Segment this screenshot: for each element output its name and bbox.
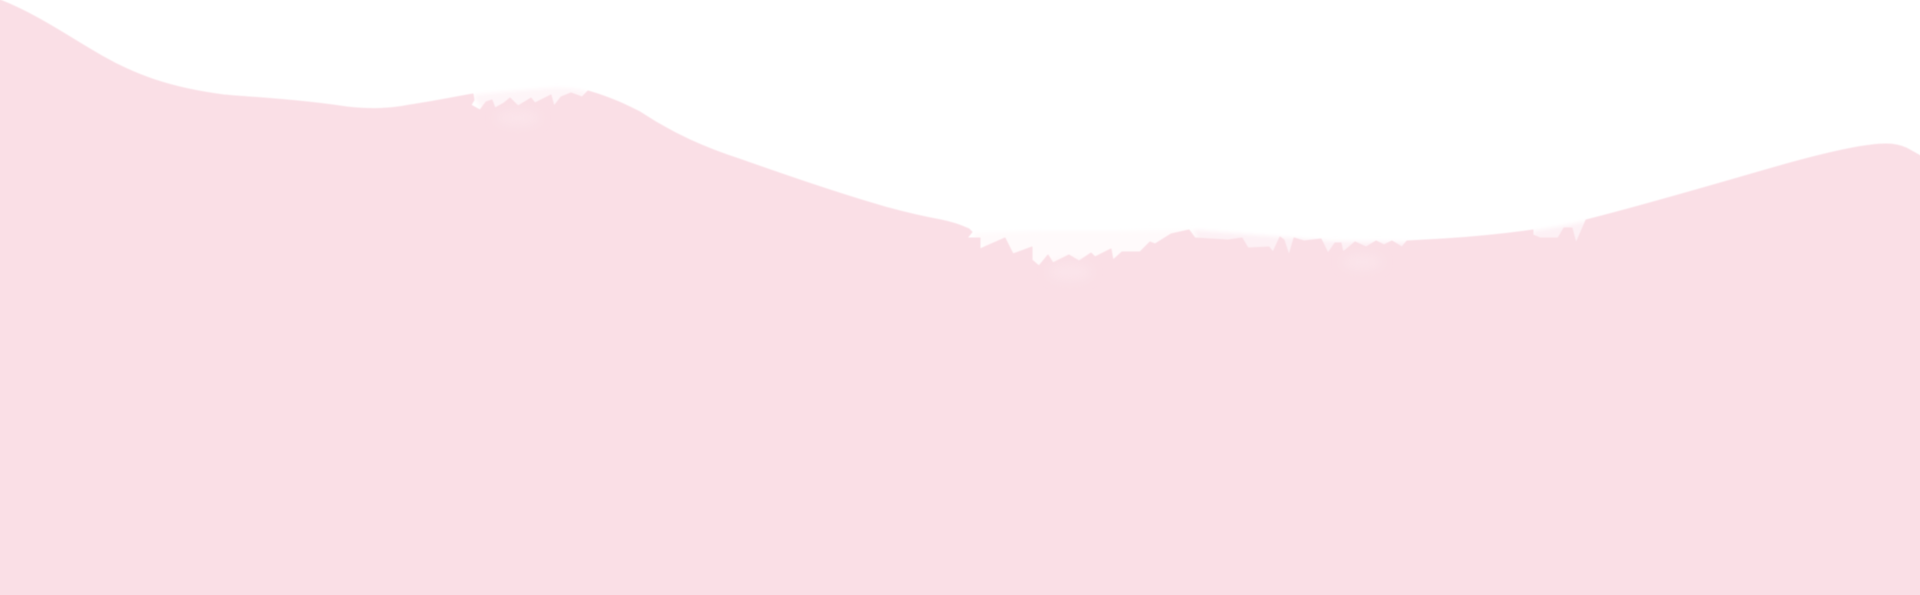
- mottled brush texture: right: [1342, 254, 1382, 270]
- faded brush fringe: centre right: [1195, 230, 1410, 262]
- mottled brush texture: centre: [1048, 263, 1092, 281]
- faded brush fringe: left: [473, 88, 588, 122]
- mottled brush texture: left: [496, 110, 540, 126]
- faded brush fringe: right: [1533, 221, 1586, 250]
- faded brush fringe: centre: [972, 230, 1199, 280]
